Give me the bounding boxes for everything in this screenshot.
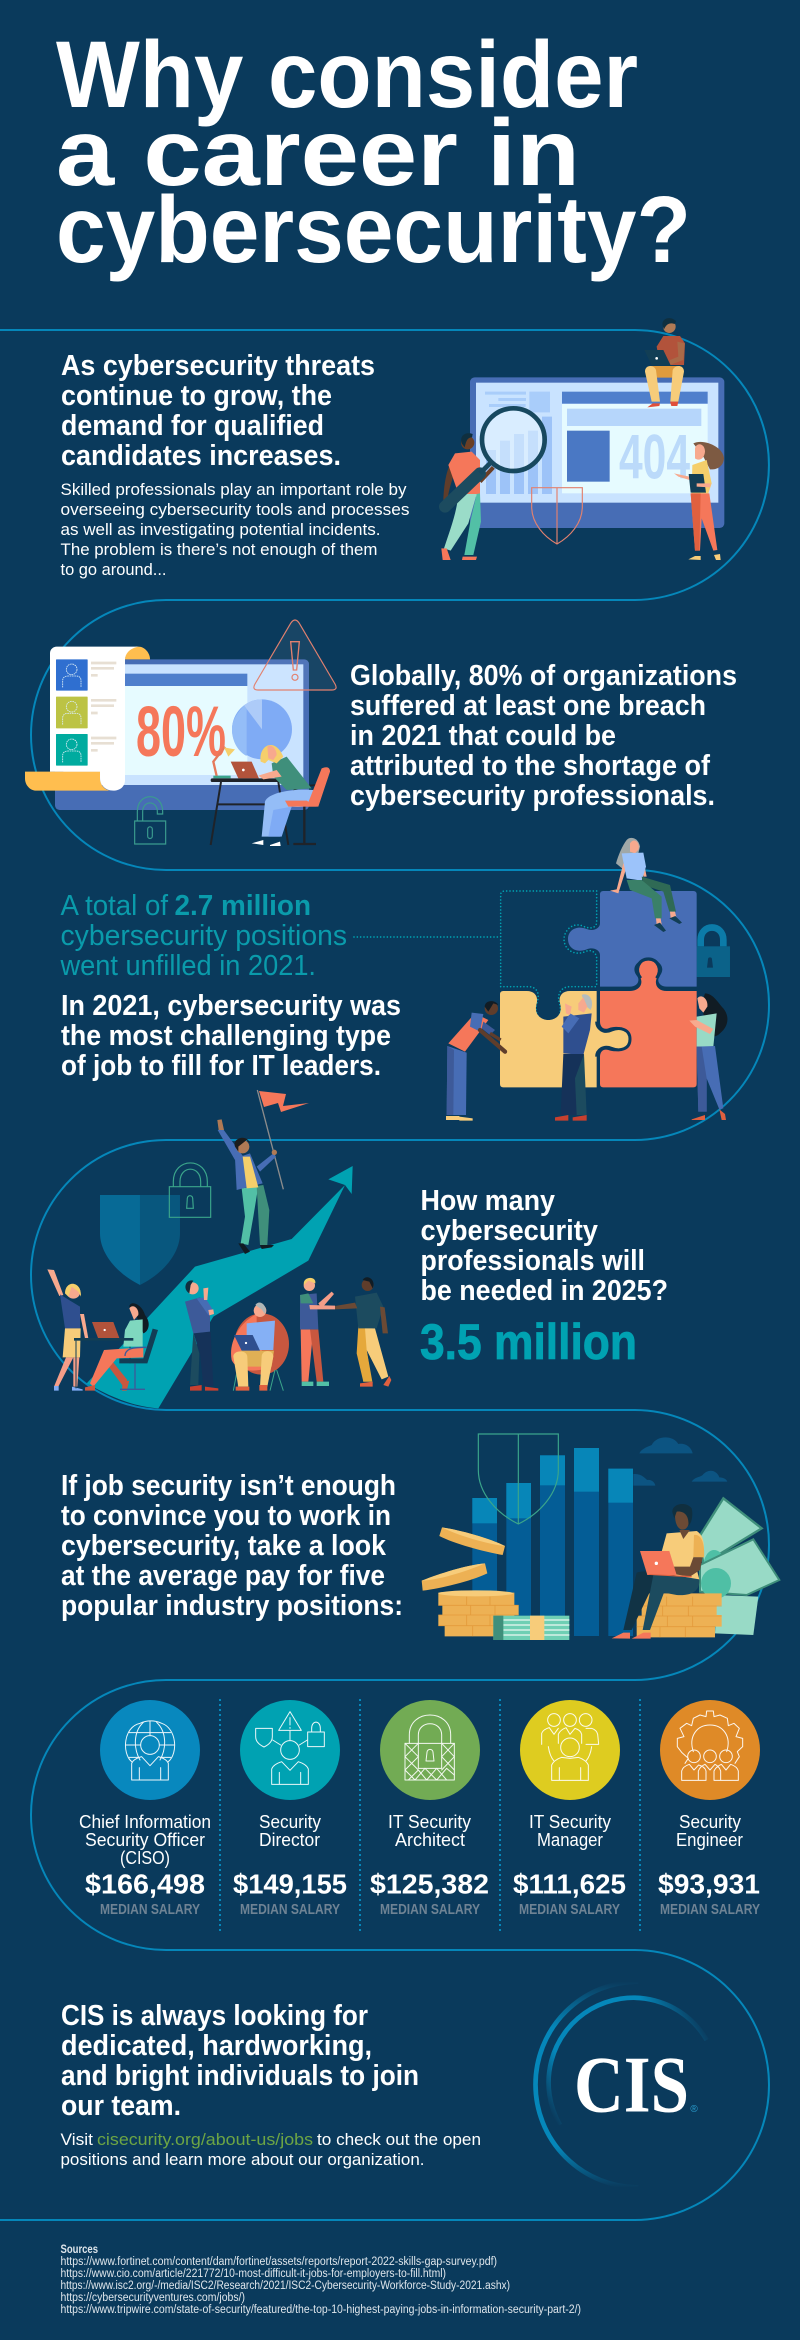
text block: globally 80%: in 2021 that could be bbox=[350, 720, 616, 752]
text block: 2.7 million unfilled: A total of bbox=[60, 890, 168, 922]
illustration: arrow, flag bearer and team bbox=[47, 1090, 391, 1408]
text block: job security: If job security isn’t enough bbox=[61, 1470, 396, 1502]
text block: job security: cybersecurity, take a look bbox=[61, 1530, 386, 1562]
text block: most challenging job: In 2021, cybersecurity was bbox=[61, 990, 401, 1022]
title: cybersecurity? bbox=[56, 177, 691, 283]
salary card: security director: MEDIAN SALARY bbox=[240, 1901, 340, 1918]
icon: person with shield, warning and lock bbox=[256, 1712, 324, 1784]
text block: most challenging job: the most challenging type bbox=[61, 1020, 391, 1052]
text block: visit link: cisecurity.org/about-us/jobs bbox=[97, 2130, 313, 2149]
text block: most challenging job: of job to fill for IT leaders. bbox=[61, 1050, 381, 1082]
stat: 3.5 million: 3.5 million bbox=[420, 1314, 637, 1370]
icon: team of people bbox=[542, 1714, 599, 1780]
salary card: CISO: Chief Information bbox=[79, 1812, 211, 1832]
text block: skilled professionals: overseeing cybersecurity tools and processes bbox=[60, 500, 410, 519]
text block: CIS is looking: CIS is always looking for bbox=[61, 2000, 368, 2032]
sources: https://www.isc2.org/-/media/ISC2/Research/2021/ISC2-Cybersecurity-Workforce-Study-2021.ashx) bbox=[60, 2280, 510, 2292]
text block: job security: at the average pay for five bbox=[61, 1560, 385, 1592]
sources: https://www.cio.com/article/221772/10-most-difficult-it-jobs-for-employers-to-fill.html) bbox=[60, 2268, 446, 2280]
illustration: bars, coins, cash and person with laptop bbox=[422, 1434, 779, 1640]
salary card: IT security architect: IT Security bbox=[388, 1812, 471, 1832]
icon: globe and person bbox=[125, 1721, 175, 1780]
salary card: security director bbox=[233, 1700, 347, 1918]
text block: job security bbox=[61, 1470, 403, 1622]
salary card: IT security manager: Manager bbox=[537, 1830, 603, 1850]
salary card: IT security manager: $111,625 bbox=[513, 1868, 626, 1900]
text block: CIS is looking: and bright individuals to join bbox=[61, 2060, 419, 2092]
logo: CIS: CIS bbox=[574, 2042, 689, 2130]
text block: visit link bbox=[60, 2130, 481, 2169]
salary card: security engineer: Security bbox=[679, 1812, 741, 1832]
sources: Sources bbox=[60, 2244, 98, 2256]
salary card: CISO: $166,498 bbox=[85, 1868, 205, 1900]
salary card: IT security manager: IT Security bbox=[529, 1812, 611, 1832]
text block: how many needed: professionals will bbox=[420, 1245, 645, 1277]
sources: https://www.tripwire.com/state-of-security/featured/the-top-10-highest-paying-jobs-in-information-security-part-2/) bbox=[60, 2304, 581, 2316]
text block: how many needed: be needed in 2025? bbox=[420, 1275, 668, 1307]
salary card: CISO: (CISO) bbox=[120, 1848, 170, 1868]
sources: https://cybersecurityventures.com/jobs/) bbox=[60, 2292, 245, 2304]
text block: visit link: Visit bbox=[60, 2130, 93, 2149]
salary card: security director: Director bbox=[259, 1830, 320, 1850]
text block: globally 80% bbox=[350, 660, 737, 812]
text block: skilled professionals bbox=[60, 480, 410, 579]
illustration: 404 monitor with three people: 404 bbox=[619, 423, 690, 493]
salary card: security engineer: Engineer bbox=[676, 1830, 743, 1850]
text block: how many needed: cybersecurity bbox=[420, 1215, 598, 1247]
text block: job security: popular industry positions: bbox=[61, 1590, 403, 1622]
salary card: CISO: MEDIAN SALARY bbox=[100, 1901, 200, 1918]
salary card: CISO: Security Officer bbox=[85, 1830, 205, 1850]
salary card: security director: $149,155 bbox=[233, 1868, 347, 1900]
text block: globally 80%: cybersecurity professionals. bbox=[350, 780, 715, 812]
text block: 2.7 million unfilled: went unfilled in 2021. bbox=[60, 950, 316, 982]
text block: globally 80%: Globally, 80% of organizations bbox=[350, 660, 737, 692]
text block: CIS is looking bbox=[61, 2000, 419, 2122]
salary card: IT security manager bbox=[513, 1700, 626, 1918]
text block: threats heading: continue to grow, the bbox=[61, 380, 332, 412]
text block: skilled professionals: The problem is there’s not enough of them bbox=[60, 540, 378, 559]
icon: gear and three people bbox=[677, 1711, 743, 1780]
illustration: 80% monitor with scroll and seated woman bbox=[25, 620, 336, 846]
text block: visit link: positions and learn more about our organization. bbox=[60, 2150, 424, 2169]
title bbox=[56, 22, 691, 283]
text block: CIS is looking: our team. bbox=[61, 2090, 181, 2122]
salary card: CISO bbox=[79, 1700, 211, 1918]
salary card: IT security architect: MEDIAN SALARY bbox=[380, 1901, 480, 1918]
salary card: security director: Security bbox=[259, 1812, 321, 1832]
text block: 2.7 million unfilled: cybersecurity positions bbox=[60, 920, 347, 952]
illustration: 80% monitor with scroll and seated woman: 80% bbox=[136, 692, 226, 772]
text block: globally 80%: suffered at least one breach bbox=[350, 690, 706, 722]
salary card: security engineer: MEDIAN SALARY bbox=[660, 1901, 760, 1918]
text block: how many needed: How many bbox=[420, 1185, 555, 1217]
icon: padlock with lattice bbox=[405, 1715, 454, 1780]
text block: threats heading: candidates increases. bbox=[61, 440, 341, 472]
text block: 2.7 million unfilled: 2.7 million bbox=[174, 890, 311, 922]
logo: CIS: ® bbox=[690, 2104, 698, 2115]
salary card: IT security manager: MEDIAN SALARY bbox=[519, 1901, 620, 1918]
salary card: security engineer bbox=[658, 1700, 760, 1918]
connecting serpentine line bbox=[0, 330, 769, 2220]
title: Why consider bbox=[56, 22, 638, 128]
text block: how many needed bbox=[420, 1185, 668, 1307]
sources: https://www.fortinet.com/content/dam/fortinet/assets/reports/report-2022-skills-gap-survey.pdf) bbox=[60, 2256, 497, 2268]
text block: job security: to convince you to work in bbox=[61, 1500, 391, 1532]
text block: visit link: to check out the open bbox=[317, 2130, 481, 2149]
dotted column dividers bbox=[220, 1699, 640, 1931]
salary card: IT security architect bbox=[370, 1700, 489, 1918]
salary card: IT security architect: $125,382 bbox=[370, 1868, 489, 1900]
text block: CIS is looking: dedicated, hardworking, bbox=[61, 2030, 372, 2062]
text block: threats heading: As cybersecurity threats bbox=[61, 350, 375, 382]
text block: skilled professionals: to go around... bbox=[60, 560, 166, 579]
text block: threats heading bbox=[61, 350, 375, 472]
text block: 2.7 million unfilled bbox=[60, 890, 347, 982]
illustration: 404 monitor with three people bbox=[441, 318, 724, 560]
text block: globally 80%: attributed to the shortage of bbox=[350, 750, 710, 782]
salary card: IT security architect: Architect bbox=[395, 1830, 465, 1850]
salary card: security engineer: $93,931 bbox=[658, 1868, 760, 1900]
text block: most challenging job bbox=[61, 990, 401, 1082]
logo: CIS bbox=[535, 1982, 707, 2187]
text block: skilled professionals: as well as investigating potential incidents. bbox=[60, 520, 380, 539]
sources bbox=[60, 2244, 581, 2316]
text block: skilled professionals: Skilled professionals play an important role by bbox=[60, 480, 407, 499]
illustration: puzzle pieces with four people bbox=[354, 838, 730, 1121]
text block: threats heading: demand for qualified bbox=[61, 410, 324, 442]
title: a career in bbox=[56, 100, 580, 206]
